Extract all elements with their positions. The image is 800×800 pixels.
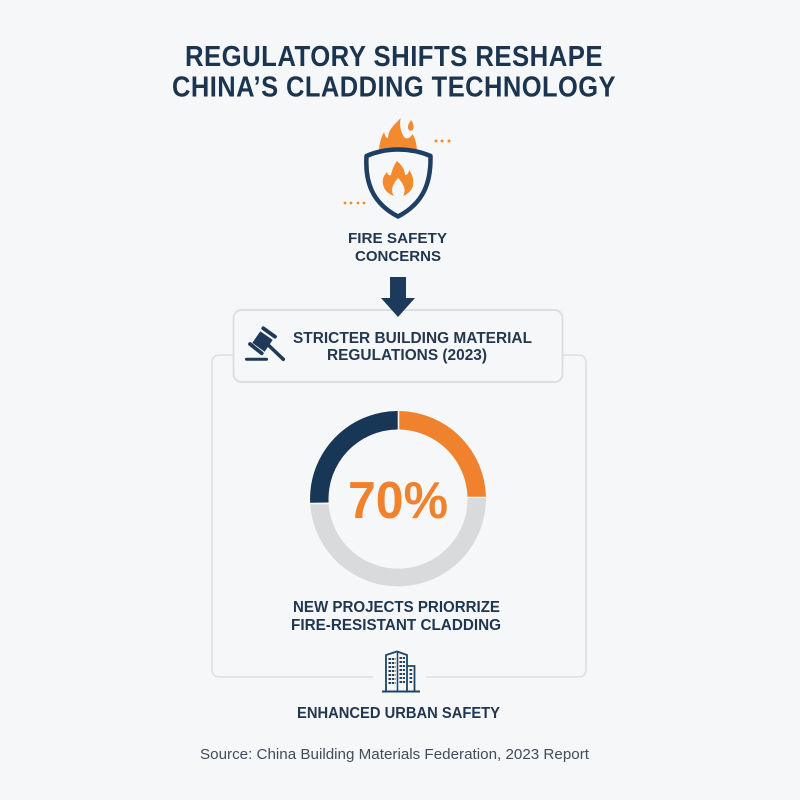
building base: [382, 690, 420, 692]
icon: top flame: [379, 118, 417, 152]
title: [172, 41, 616, 104]
label: fire safety concerns: [348, 230, 447, 265]
donut orange segment: [399, 411, 486, 497]
donut caption: NEW PROJECTS PRIORRIZE: [293, 599, 500, 616]
icon: gavel: [246, 328, 283, 359]
donut caption: [291, 599, 501, 634]
donut grey remainder: [310, 498, 486, 586]
donut navy segment: [310, 411, 398, 503]
label: fire safety concerns: FIRE SAFETY: [348, 230, 447, 247]
donut value: 70%: [348, 472, 448, 530]
regulations text: REGULATIONS (2023): [327, 347, 487, 364]
icon: fire shield: [344, 118, 450, 216]
label: fire safety concerns: CONCERNS: [355, 248, 441, 265]
icon: flame droplet: [408, 120, 414, 131]
icon: building: [382, 652, 420, 692]
outer panel frame: [212, 355, 586, 677]
label: enhanced urban safety: ENHANCED URBAN SAFETY: [297, 705, 501, 722]
building towers: [386, 652, 414, 691]
building windows: [388, 658, 413, 683]
regulations text: [293, 330, 532, 364]
donut caption: FIRE-RESISTANT CLADDING: [291, 617, 501, 634]
decorative spark dots: [344, 140, 450, 204]
panel: regulations box: [234, 310, 562, 382]
source note: Source: China Building Materials Federation, 2023 Report: [200, 746, 590, 763]
title: CHINA’S CLADDING TECHNOLOGY: [172, 72, 616, 104]
icon: shield outline: [366, 150, 431, 216]
donut chart: 70%: [310, 411, 486, 586]
title: REGULATORY SHIFTS RESHAPE: [185, 41, 603, 73]
regulations text: STRICTER BUILDING MATERIAL: [293, 330, 532, 347]
arrow: down to regulations: [381, 277, 415, 317]
icon: inner flame: [383, 161, 413, 196]
